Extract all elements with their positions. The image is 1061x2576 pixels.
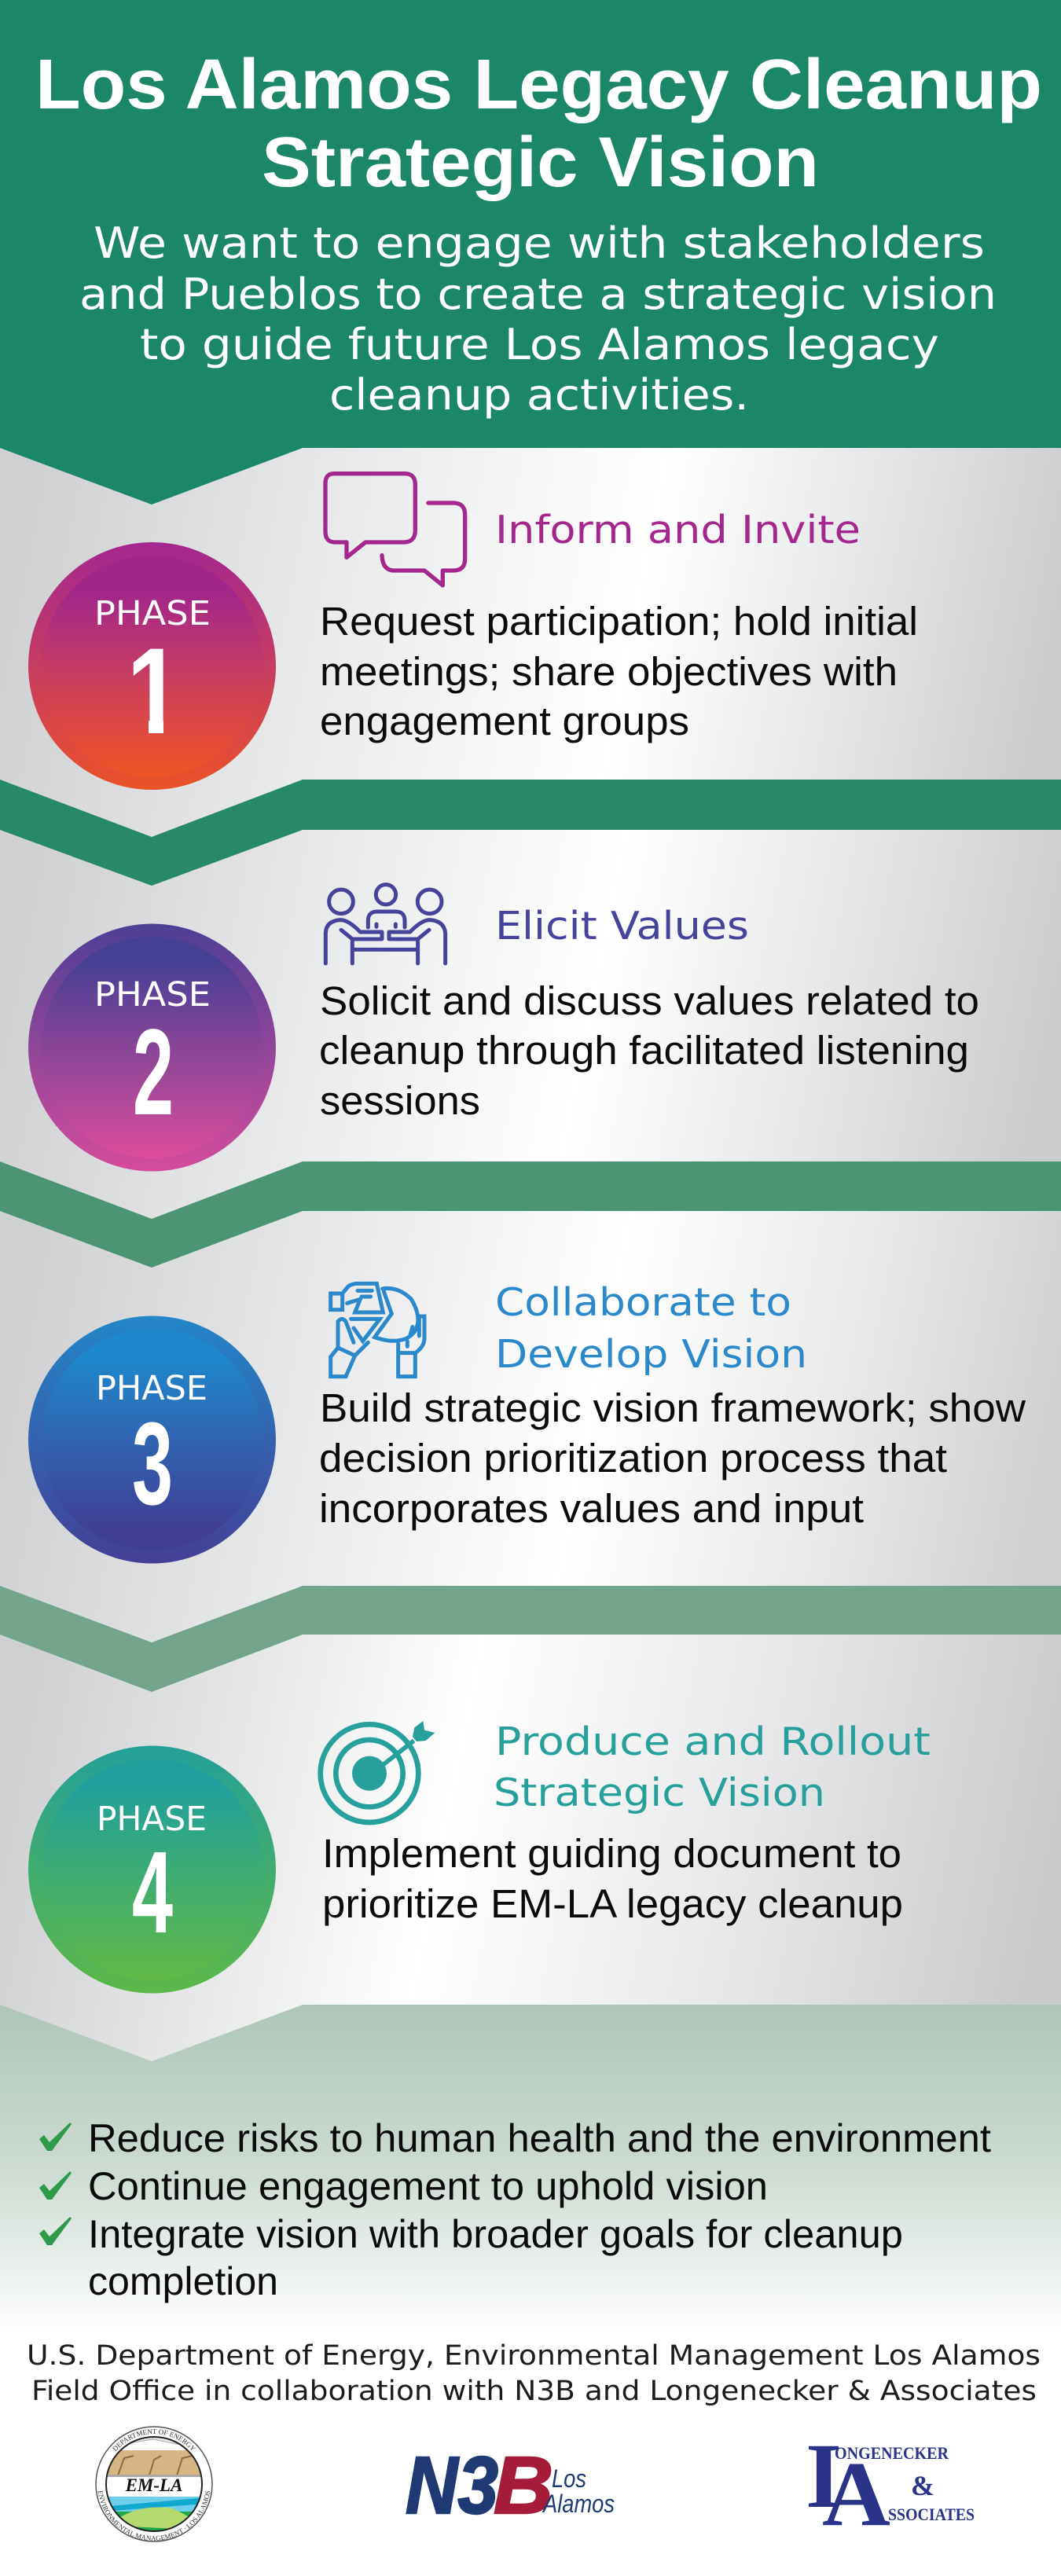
body text phase 2: Solicit and discuss values related to <box>320 978 979 1023</box>
credit text: U.S. Department of Energy, Environmental Management Los Alamos <box>27 2340 1041 2372</box>
body text phase 2: sessions <box>320 1078 480 1123</box>
phase 1 badge <box>28 542 276 790</box>
body text phase 3: decision prioritization process that <box>319 1436 947 1481</box>
icon: hands assembling puzzle <box>331 1283 424 1377</box>
subtitle: We want to engage with stakeholders <box>94 218 985 268</box>
title: Strategic Vision <box>262 123 819 202</box>
subtitle: to guide future Los Alamos legacy <box>140 320 939 369</box>
logo: EM-LA seal: EM-LA <box>125 2475 182 2495</box>
heading: Produce and Rollout Strategic Vision: Strategic Vision <box>494 1771 825 1815</box>
logo: Longenecker & Associates: & <box>911 2470 934 2501</box>
logo: Longenecker & Associates <box>806 2424 975 2545</box>
body text phase 1: meetings; share objectives with <box>320 649 898 694</box>
checklist text: Integrate vision with broader goals for cleanup <box>88 2212 903 2256</box>
title <box>35 46 1042 202</box>
connector band 2 <box>0 1155 1061 1273</box>
panel: phase 4 <box>0 1635 1061 2061</box>
bottom gradient background <box>0 2005 1061 2335</box>
body text phase 4: prioritize EM-LA legacy cleanup <box>322 1881 903 1926</box>
connector band 1 <box>0 550 1061 888</box>
checklist text <box>88 2116 991 2303</box>
heading: Inform and Invite: Inform and Invite <box>495 508 861 552</box>
title: Los Alamos Legacy Cleanup <box>35 46 1042 124</box>
body text phase 3 <box>319 1385 1026 1531</box>
check icons <box>39 2123 72 2245</box>
heading: Collaborate to Develop Vision <box>495 1280 807 1377</box>
body text phase 1: Request participation; hold initial <box>320 599 918 644</box>
panel 1 background <box>0 448 1061 837</box>
body text phase 1 <box>320 599 918 743</box>
phase 4 badge <box>28 1746 276 1993</box>
phase 3 badge: 3 <box>132 1399 173 1529</box>
phase 2 badge <box>28 924 276 1171</box>
heading: Produce and Rollout Strategic Vision: Produce and Rollout <box>495 1719 931 1764</box>
logo: Longenecker & Associates: A <box>822 2442 890 2545</box>
phase 4 badge: 4 <box>132 1828 173 1958</box>
phase 4 badge: PHASE <box>97 1800 207 1839</box>
subtitle <box>79 218 997 420</box>
logo: Longenecker & Associates: SSOCIATES <box>888 2504 975 2524</box>
logo: EM-LA seal: ENVIRONMENTAL MANAGEMENT · LOS ALAMOS <box>97 2490 211 2541</box>
icon: people at table <box>325 885 446 963</box>
phase 1 badge: PHASE <box>94 594 211 633</box>
logo: N3B Los Alamos <box>406 2440 615 2530</box>
body text phase 4 <box>322 1831 903 1926</box>
checklist text: Continue engagement to uphold vision <box>88 2164 768 2208</box>
phase 2 badge: PHASE <box>94 975 211 1015</box>
icon: target with arrow <box>321 1721 435 1822</box>
logo: EM-LA seal: DEPARTMENT OF ENERGY <box>112 2429 196 2452</box>
heading: Collaborate to Develop Vision: Collaborate to <box>495 1280 791 1325</box>
heading: Produce and Rollout Strategic Vision <box>494 1719 931 1815</box>
heading: Collaborate to Develop Vision: Develop Vision <box>495 1332 807 1377</box>
icon: speech bubbles <box>325 474 465 585</box>
credit text: Field Office in collaboration with N3B and Longenecker & Associates <box>31 2376 1037 2407</box>
subtitle: and Pueblos to create a strategic vision <box>79 270 997 319</box>
logo: N3B Los Alamos: Los <box>552 2464 586 2493</box>
panel: phase 2 <box>0 830 1061 1219</box>
panel: phase 3 <box>0 1211 1061 1642</box>
connector band 3 <box>0 1580 1061 1697</box>
checklist text: completion <box>88 2259 278 2303</box>
phase 1 badge: 1 <box>127 622 182 759</box>
credit text <box>27 2340 1041 2407</box>
body text phase 1: engagement groups <box>320 699 689 743</box>
body text phase 4: Implement guiding document to <box>322 1831 901 1876</box>
phase 3 badge: PHASE <box>96 1369 207 1408</box>
header background <box>0 0 1061 550</box>
body text phase 2: cleanup through facilitated listening <box>319 1028 969 1073</box>
body text phase 2 <box>319 978 979 1123</box>
panel: phase 1 <box>0 448 1061 837</box>
logo: N3B Los Alamos: Alamos <box>542 2490 615 2518</box>
checklist text: Reduce risks to human health and the environment <box>88 2116 991 2160</box>
panel 3 background <box>0 1211 1061 1642</box>
logo: Longenecker & Associates: I <box>806 2424 842 2527</box>
phase 3 badge <box>28 1316 276 1564</box>
logo: N3B Los Alamos: B <box>494 2440 553 2530</box>
logo: N3B Los Alamos: N3 <box>406 2440 498 2530</box>
subtitle: cleanup activities. <box>329 370 749 420</box>
logo: Longenecker & Associates: ONGENECKER <box>835 2443 949 2463</box>
phase 2 badge: 2 <box>133 1005 174 1141</box>
panel 2 background <box>0 830 1061 1219</box>
body text phase 3: incorporates values and input <box>319 1486 864 1531</box>
logo: EM-LA seal <box>95 2426 213 2542</box>
outcomes checklist <box>39 2116 991 2303</box>
body text phase 3: Build strategic vision framework; show <box>320 1385 1026 1430</box>
heading: Elicit Values: Elicit Values <box>495 904 749 949</box>
panel 4 background <box>0 1635 1061 2061</box>
